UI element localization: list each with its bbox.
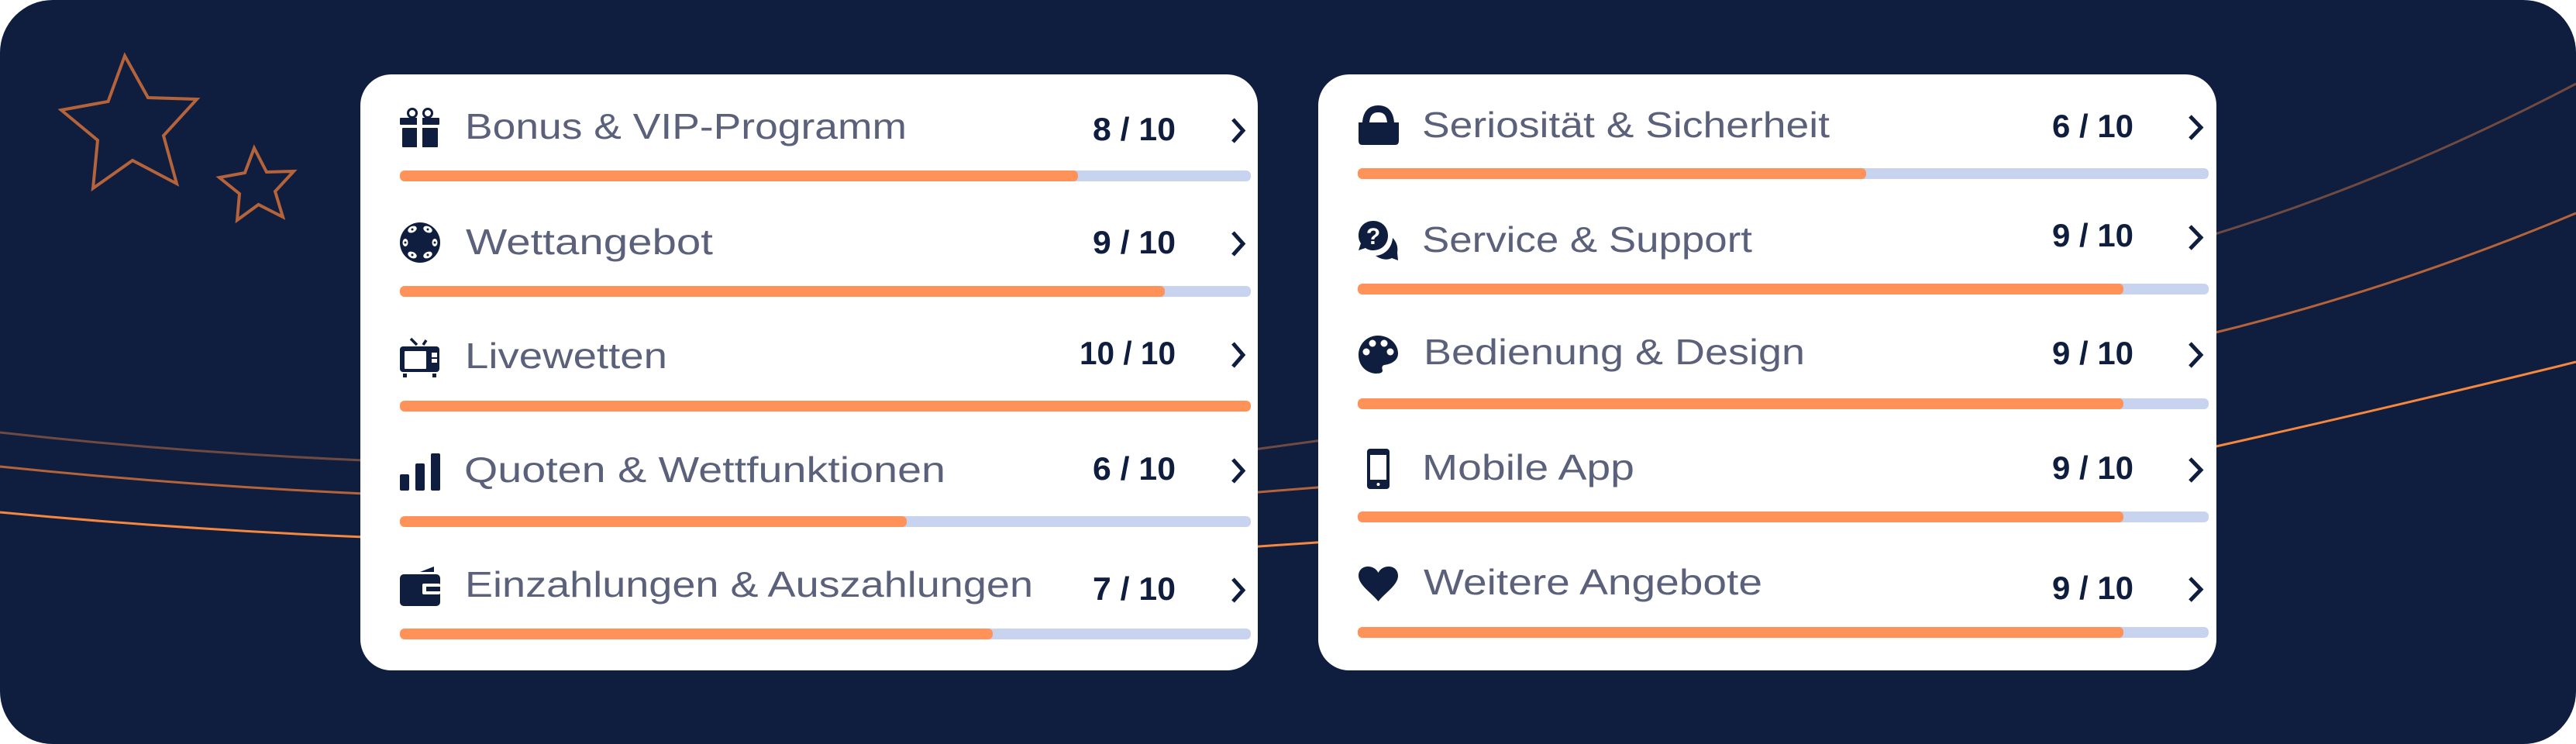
progress bar	[400, 629, 1251, 639]
icon: chat question bubbles: ?	[1366, 224, 1380, 250]
chevron	[1233, 460, 1243, 482]
progress bar	[400, 286, 1251, 297]
panel: left ratings card	[360, 74, 1258, 670]
row: Einzahlungen & Auszahlungen	[400, 564, 1251, 639]
progress bar	[1358, 512, 2209, 522]
label: Quoten & Wettfunktionen	[464, 450, 945, 490]
label: Seriosität & Sicherheit	[1422, 105, 1830, 145]
decorative curve: bright orange	[0, 362, 2576, 547]
label: Bonus & VIP-Programm	[465, 106, 907, 146]
icon: chat question bubbles	[1359, 221, 1398, 260]
icon: casino chip	[400, 222, 440, 263]
progress bar	[1358, 284, 2209, 294]
chevron	[1233, 119, 1243, 142]
chevron	[1233, 343, 1243, 367]
chevron	[2190, 226, 2201, 249]
score: 9 / 10	[1093, 224, 1176, 260]
row: Quoten & Wettfunktionen	[400, 450, 1251, 527]
chevron	[2190, 459, 2201, 481]
score: 10 / 10	[1080, 335, 1176, 371]
progress bar	[1358, 398, 2209, 409]
icon: television	[400, 339, 439, 377]
icon: small star outline	[219, 148, 294, 220]
icon: padlock	[1359, 105, 1399, 145]
label: Wettangebot	[466, 222, 713, 262]
icon: gift	[400, 108, 439, 147]
score: 9 / 10	[2052, 450, 2133, 486]
row: Seriosität & Sicherheit	[1358, 105, 2209, 179]
row: Bonus & VIP-Programm	[400, 106, 1251, 181]
icon: paint palette	[1359, 336, 1398, 374]
chevron	[1233, 232, 1243, 255]
row: Livewetten	[400, 335, 1251, 412]
label: Bedienung & Design	[1424, 332, 1805, 372]
icon: large star outline	[61, 56, 197, 188]
row: Mobile App	[1358, 447, 2209, 522]
icon: wallet	[400, 567, 440, 606]
progress bar	[1358, 627, 2209, 638]
label: Einzahlungen & Auszahlungen	[465, 564, 1033, 604]
score: 9 / 10	[2052, 570, 2133, 606]
score: 6 / 10	[2052, 108, 2133, 144]
row: Wettangebot	[400, 222, 1251, 297]
score: 9 / 10	[2052, 335, 2133, 371]
progress bar	[400, 516, 1251, 527]
progress bar	[400, 401, 1251, 412]
label: Mobile App	[1422, 447, 1634, 487]
progress bar	[400, 170, 1251, 181]
label: Service & Support	[1422, 219, 1752, 260]
chevron	[2190, 116, 2201, 139]
panel: right ratings card	[1318, 74, 2216, 670]
score: 7 / 10	[1093, 570, 1176, 607]
icon: smartphone	[1367, 449, 1390, 489]
row: Service & Support	[1358, 217, 2209, 294]
icon: heart	[1359, 567, 1398, 601]
chevron	[1233, 579, 1243, 601]
label: Livewetten	[465, 336, 667, 376]
score: 9 / 10	[2052, 217, 2133, 253]
score: 8 / 10	[1093, 111, 1176, 147]
label: Weitere Angebote	[1424, 562, 1762, 602]
chevron	[2190, 343, 2201, 367]
chevron	[2190, 578, 2201, 601]
row: Bedienung & Design	[1358, 332, 2209, 409]
progress bar	[1358, 168, 2209, 179]
row: Weitere Angebote	[1358, 562, 2209, 638]
score: 6 / 10	[1093, 450, 1176, 487]
icon: signal bars	[400, 453, 440, 491]
decorative curve: muted brown	[0, 84, 2576, 460]
decorative curve: medium orange	[0, 213, 2576, 494]
